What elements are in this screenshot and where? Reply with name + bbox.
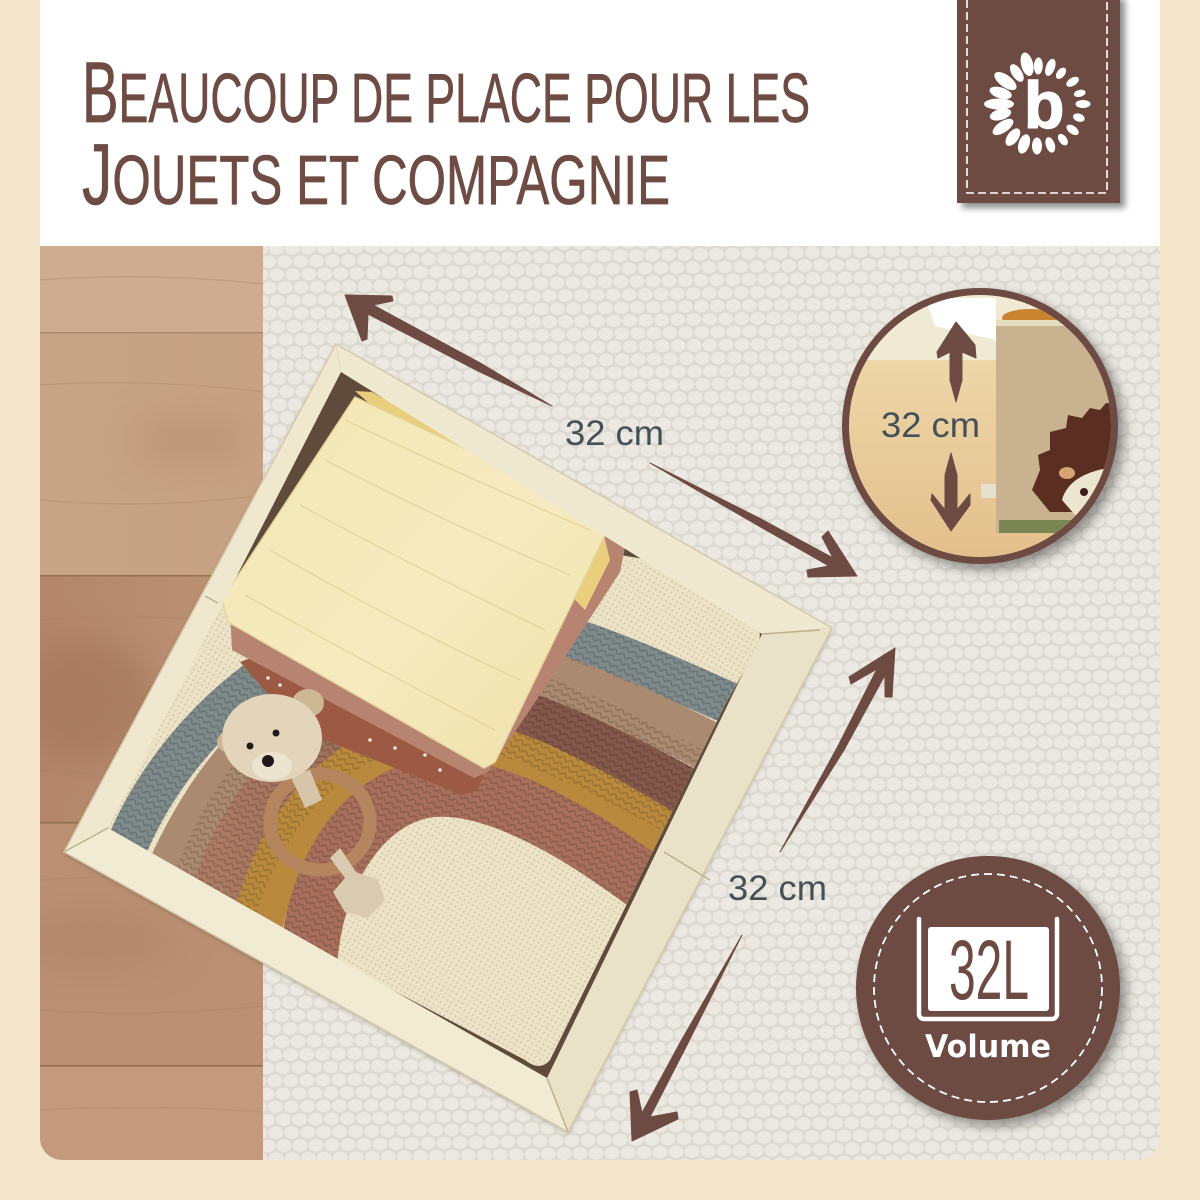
box wall: front [64, 828, 568, 1132]
box wall: left [64, 344, 341, 852]
orange plush [1002, 309, 1057, 320]
arrow: up [937, 322, 976, 402]
rug [263, 246, 1163, 1160]
knitted rainbow blanket [108, 556, 760, 1066]
brand label tag [957, 0, 1120, 203]
volume badge [856, 856, 1120, 1120]
volume caption: Volume [925, 1029, 1051, 1065]
room background [867, 295, 1093, 360]
title: JOUETS ET COMPAGNIE [82, 127, 670, 223]
stack of muslin cloths [222, 391, 627, 795]
icon: sunflower logo [984, 51, 1090, 155]
icon: container [919, 919, 1057, 1019]
storage box with contents [64, 344, 832, 1132]
arrow: down [931, 453, 970, 531]
inset: height of the box [840, 285, 1125, 570]
fabric box [996, 320, 1121, 533]
label: side edge: 32 cm [728, 869, 827, 908]
arrow: side edge towards lower left [630, 935, 742, 1141]
icon: sunflower logo: b [1024, 68, 1064, 142]
small logo tag [981, 484, 996, 498]
arrow: side edge towards upper right [780, 648, 895, 852]
arrow: top edge towards lower right [650, 463, 857, 577]
title: BEAUCOUP DE PLACE POUR LES [82, 45, 810, 141]
photo panel: floor and rug [0, 246, 1163, 1160]
hedgehog [1032, 403, 1111, 515]
box wall: back [336, 344, 832, 634]
box interior [64, 344, 832, 1132]
wooden ring [270, 774, 370, 870]
volume value: 32L [949, 923, 1029, 1017]
header band [40, 0, 1160, 246]
label: height: 32 cm [881, 406, 980, 445]
arrow: top edge towards upper left [345, 295, 552, 406]
label: top edge: 32 cm [565, 414, 664, 453]
crochet bear toy [217, 689, 385, 918]
box wall: right [547, 628, 832, 1132]
title [82, 45, 810, 223]
wood floor [40, 246, 263, 1160]
